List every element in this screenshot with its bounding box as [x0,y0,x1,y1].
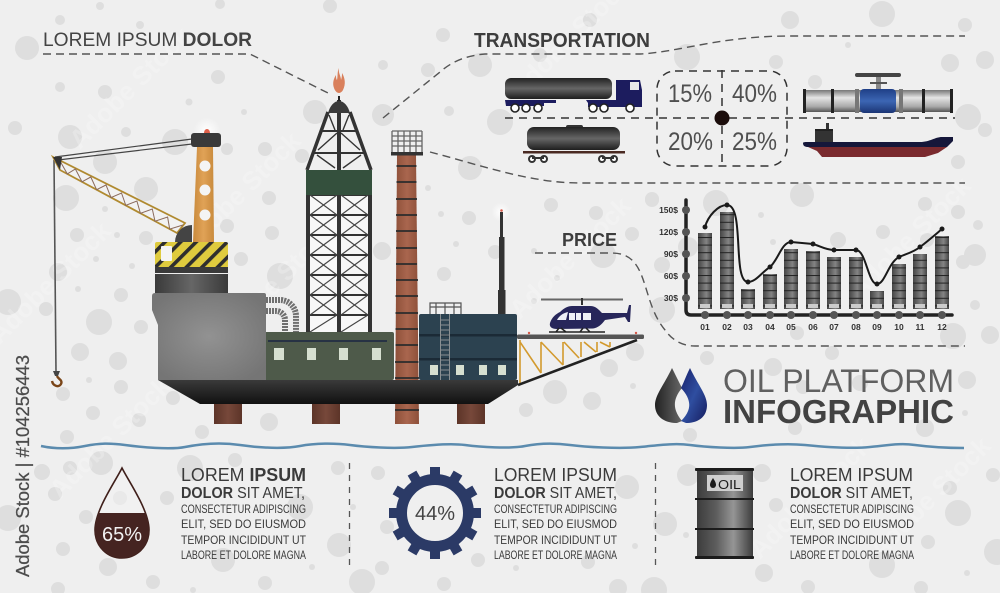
stock watermark: Adobe Stock [208,215,342,349]
chimney [391,131,423,424]
derrick lattice [306,195,372,333]
crane tower [193,147,214,242]
text block 1 [181,465,307,562]
blue module [419,303,517,380]
title: INFOGRAPHIC [723,393,954,430]
helideck [517,332,644,385]
text block 2: ELIT, SED DO EIUSMOD [494,517,617,531]
icon: oil barrel [695,468,754,559]
x axis labels: 11 [916,322,925,332]
x axis labels: 03 [743,322,753,332]
icon: tanker ship [803,123,953,157]
icon: oil barrel: OIL [718,477,741,492]
heading: lorem ipsum dolor: LOREM IPSUM DOLOR [43,30,252,51]
x axis labels: 09 [872,322,882,332]
ladder [440,314,450,380]
green module windows [274,348,381,360]
price chart [659,200,952,332]
y axis labels: 120$ [659,227,678,237]
helicopter windows [557,312,591,320]
main deck [158,380,518,404]
y axis labels: 90$ [664,249,678,259]
icon: pipeline valve [803,73,953,113]
derrick green band [306,170,372,195]
water line [41,444,964,448]
platform legs [214,404,485,424]
chart axes [686,200,952,315]
blue module windows [430,365,506,375]
grey hull block [152,293,266,380]
x axis labels: 06 [808,322,818,332]
transport percentages: 15% [668,80,712,108]
x axis labels: 02 [722,322,732,332]
x axis labels: 05 [786,322,796,332]
derrick top [307,100,371,170]
icon: logo oil drops [655,368,707,423]
text block 3 [790,465,915,562]
centre dot [714,110,730,126]
transport percentages [668,80,777,156]
y axis labels [659,205,678,303]
text block 3: CONSECTETUR ADIPISCING [790,502,914,516]
crane base dome [175,225,192,242]
antenna [491,202,511,314]
helideck strut [518,340,637,385]
text block 2 [494,465,618,562]
crane cab [191,133,221,147]
flame [333,68,345,93]
stock watermark: Adobe Stock [863,430,997,564]
crane [52,117,228,386]
text block 2: LABORE ET DOLORE MAGNA [494,548,617,562]
side credit: Adobe Stock | #104256443 [13,355,33,577]
helideck truss [520,340,610,384]
helicopter skids [549,328,605,332]
x axis labels: 12 [937,322,947,332]
x axis labels: 08 [851,322,861,332]
text block 1: DOLOR SIT AMET, [181,485,305,502]
dashed leader lines [43,36,965,346]
chart bars [698,212,949,309]
title [723,363,954,430]
transport percent frame [505,70,955,167]
icon: rail tank car [523,125,625,162]
text block 1: LOREM IPSUM [181,465,306,485]
stock watermark: Adobe Stock [743,430,877,564]
stock watermark: Adobe Stock [173,125,307,259]
stock watermark: Adobe Stock [43,370,177,504]
crane cables [55,139,192,160]
heading: transportation: TRANSPORTATION [474,30,650,52]
helicopter [541,298,631,332]
dividers [350,463,656,565]
icon: gear 44% [389,467,481,559]
y axis labels: 150$ [659,205,678,215]
stock watermark: Adobe Stock [63,20,197,154]
axis dots [682,206,946,319]
text block 3: TEMPOR INCIDIDUNT UT [790,533,915,547]
icon: oil drop 65% [95,468,149,558]
y axis labels: 30$ [664,293,678,303]
text block 3: LOREM IPSUM [790,465,913,485]
crane warning light [193,117,221,145]
x axis labels: 04 [765,322,775,332]
text block 2: DOLOR SIT AMET, [494,485,617,502]
bar labels [700,304,947,308]
text block 3: DOLOR SIT AMET, [790,485,913,502]
crane hook [52,371,61,386]
text block 2: TEMPOR INCIDIDUNT UT [494,533,618,547]
crane hook line [54,160,56,372]
drilling derrick [306,68,372,333]
icon: gear 44%: 44% [415,503,455,525]
text block 2: LOREM IPSUM [494,465,617,485]
transport percentages: 25% [732,128,777,156]
text block 1: LABORE ET DOLORE MAGNA [181,548,306,562]
heading: price: PRICE [562,230,617,250]
x axis labels: 01 [700,322,710,332]
crane turret [155,274,228,293]
price line [702,202,944,286]
text block 3: ELIT, SED DO EIUSMOD [790,517,914,531]
x axis labels: 07 [829,322,839,332]
text block 1: TEMPOR INCIDIDUNT UT [181,533,307,547]
stock watermark: Adobe Stock [503,190,637,324]
green module [261,332,394,380]
y axis labels: 60$ [664,271,678,281]
chimney grate platform [391,131,423,156]
helideck surface [517,334,644,339]
hazard box [155,242,228,268]
text block 1: CONSECTETUR ADIPISCING [181,502,306,516]
crane boom [53,157,185,233]
transport percentages: 20% [668,128,713,156]
crane tower portholes [200,160,210,220]
stock watermark: Adobe Stock [843,170,977,304]
derrick crown [328,101,350,113]
icon: oil drop 65%: 65% [102,524,142,546]
x axis labels: 10 [894,322,904,332]
text block 3: LABORE ET DOLORE MAGNA [790,548,914,562]
text block 1: ELIT, SED DO EIUSMOD [181,517,306,531]
transport percentages: 40% [732,80,777,108]
title: OIL PLATFORM [723,363,954,399]
x axis labels [700,322,947,332]
icon: tanker truck [505,78,642,112]
text block 2: CONSECTETUR ADIPISCING [494,502,617,516]
exhaust pipes [266,300,296,332]
roof handrail [430,303,461,314]
